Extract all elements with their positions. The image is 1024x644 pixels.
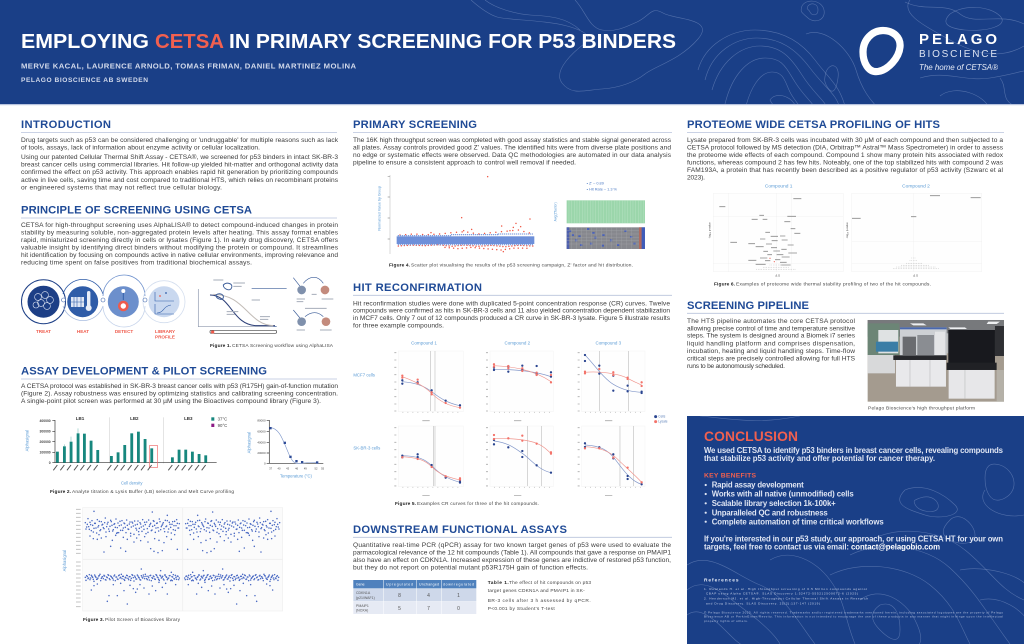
primary screening text: The 16K high throughput screen was completed with good assay statistics and stable signal generated across — [353, 137, 672, 144]
table 1 — [353, 580, 476, 614]
intro text: or engineered systems that may not reflect true cellular biology. — [21, 185, 222, 192]
volcano titles — [765, 184, 930, 190]
heading: primary screening: PRIMARY SCREENING — [353, 119, 477, 131]
line chart: melt curve: 55 — [321, 466, 325, 470]
table 1 caption: BR-3 cells after 3 h assessed by qPCR. — [488, 598, 591, 604]
line chart: melt curve: Alphasignal — [247, 432, 252, 453]
compound titles: Compound 2 — [504, 340, 531, 345]
intro text — [21, 137, 339, 192]
title: IN PRIMARY SCREENING FOR P53 BINDERS — [229, 30, 676, 53]
key benefits list — [705, 481, 884, 526]
key benefits list: Scalable library selection 1k-100k+ — [712, 499, 836, 508]
panel: conclusion — [687, 416, 1024, 644]
line chart: melt curve: 43 — [286, 466, 290, 470]
line chart: melt curve: Temperature (°C) — [280, 474, 313, 479]
principle text: rapid, miniaturized screening directly in cells or lysates (Figure 1). In early drug discovery, CETSA offers — [21, 237, 339, 244]
references: References — [704, 577, 739, 583]
primary screening text: no edge or systematic effects were observed. Data QC methodologies are automated in our data analysis — [353, 152, 672, 159]
references: and Drug Discovery. SLAS Discovery. 25(2):137-147 (2019) — [706, 601, 820, 605]
figure 3 caption — [83, 617, 181, 623]
row labels: MCF7 cells — [353, 372, 375, 377]
downstream text: also have an effect on CDKN1A. Increased expression of these genes are indictive of restored p53 function, — [353, 557, 671, 564]
assay text: A single-point pilot screen was performed at 30 µM using the Bioactives compound library (Figure 3). — [21, 398, 321, 405]
table 1: Unchanged — [419, 583, 439, 587]
row labels — [353, 372, 380, 451]
proteome text: CETSA protocol followed by MS detection (DIA, Orbitrap™ Astral™ Mass Spectrometer) in order to assess — [687, 145, 1004, 152]
volcano plots — [707, 184, 982, 278]
line chart: melt curve: 40000 — [257, 440, 266, 444]
protein label marks — [719, 196, 981, 265]
bar chart: analyte titration: 300000 — [40, 430, 51, 434]
intro text: breast cancer cells using commercial libraries. Hit follow-up yielded hit-matter and orthogonal activity data — [21, 161, 338, 168]
figure 4 caption: Scatter plot visualising the results of the p53 screening campaign, Z' factor and hit distribution. — [411, 263, 633, 269]
downstream text — [353, 542, 671, 572]
header contour pattern — [471, 0, 1024, 110]
hit reconfirmation text: for three example compounds. — [353, 322, 444, 329]
pipeline text: steps. The system is designed around a Biomek i7 series — [687, 333, 856, 340]
bar chart: analyte titration: 90°C — [218, 423, 227, 428]
title: CETSA — [155, 30, 224, 53]
affiliation: PELAGO BIOSCIENCE AB SWEDEN — [21, 77, 148, 84]
primary screening text: all plates. Assay controls provided good Z' values. The identified hits were from diverse plate positions and — [353, 145, 671, 152]
table 1: CDKN1A — [356, 591, 371, 595]
scatter plot: pilot screen: Alphasignal — [62, 550, 67, 571]
panel: screening pipeline — [687, 300, 1004, 411]
figure 1 caption: Figure 1. — [210, 343, 231, 349]
heading: downstream: DOWNSTREAM FUNCTIONAL ASSAYS — [353, 524, 568, 536]
figure 3 caption: Pilot Screen of Bioactives library — [105, 617, 181, 623]
panel: downstream functional assays — [353, 524, 672, 614]
principle text: valuable insight by identifying direct binders without modifying the protein or compound. It streamlines — [21, 244, 339, 251]
table 1: 0 — [457, 606, 460, 612]
copyright: Bioscience AB or PerkinElmer/Revvity. This information is not intended to encourage the use of these products in any manner that might infringe upon the intellectual — [704, 615, 1003, 619]
icon: heat — [63, 279, 103, 334]
panel: hit reconfirmation — [353, 282, 672, 507]
key benefits list: Works with all native (unmodified) cells — [712, 490, 854, 499]
protein point cloud — [757, 258, 940, 269]
line chart: melt curve — [247, 419, 325, 479]
downstream text: but they do not report on potential mutant p53R175H gain of function effects. — [353, 565, 588, 572]
pipeline text: liquid handling platform and comprises dispensation, — [687, 340, 855, 347]
table 1 caption — [488, 580, 591, 612]
scatter plot: pilot screen — [62, 508, 283, 611]
bar chart: analyte titration: LB3 — [184, 416, 193, 421]
conclusion contour pattern — [687, 416, 1024, 644]
workflow diagram — [198, 277, 333, 334]
red points — [402, 364, 642, 482]
principle text: hit identification by focusing on compounds active in native cellular environments, improving relevance and — [21, 252, 338, 259]
heading: proteome: PROTEOME WIDE CETSA PROFILING OF HITS — [687, 119, 941, 131]
assay text: (Figure 2). Assay robustness was ensured by optimizing statistics and calibrating screening concentration. — [21, 390, 338, 397]
table 1: 5 — [398, 606, 401, 612]
key benefits list: Complete automation of time critical workflows — [712, 517, 884, 526]
references — [704, 577, 868, 605]
table 1: 4 — [427, 593, 430, 599]
figure 6 caption: Figure 6. — [714, 282, 735, 288]
figure 4 caption: Figure 4. — [389, 263, 410, 269]
photo caption: Pelago Bioscience's high throughput platform — [868, 405, 975, 411]
table 1 caption: The effect of hit compounds on p53 — [509, 580, 591, 586]
intro text: Drug targets such as p53 can be considered challenging or 'undruggable' for multiple reasons such as lack — [21, 137, 339, 144]
bar chart: analyte titration: 400000 — [40, 419, 51, 423]
table 1: PMAIP1 — [356, 604, 369, 608]
curve legend: Cells — [658, 415, 666, 419]
CR curve charts — [353, 340, 668, 496]
logo — [863, 30, 998, 72]
table 1 caption: target genes CDKN1A and PMAIP1 in SK- — [488, 588, 585, 594]
line chart: melt curve: 40 — [277, 466, 281, 470]
table 1 caption: P<0.001 by Student's T-test — [488, 606, 555, 612]
primary screening text — [353, 137, 672, 167]
line chart: melt curve: 0 — [264, 461, 266, 465]
icon: library profile: LIBRARY — [155, 329, 175, 334]
figure 3 caption: Figure 3. — [83, 617, 104, 623]
contact text: targets, feel free to contact us via email: — [704, 542, 849, 551]
blue points — [402, 355, 642, 484]
references: CBAP using Alpha CETSA®. SLAS Discovery 1:52472-555212500072-6 (2025) — [706, 592, 858, 596]
logo: PELAGO — [919, 31, 997, 48]
logo: The home of CETSA® — [919, 63, 998, 72]
hit reconfirmation text: Hit reconfirmation studies were done with duplicated 5-point concentration response (CR) curves. Twelve — [353, 300, 670, 307]
figure 2 caption: Analyte titration & Lysis Buffer (LB) selection and Melt Curve profiling — [72, 489, 234, 495]
references: 1. Rowlands H. et al. High throughput screening of 0.5 Million compounds against — [704, 587, 867, 591]
header banner — [0, 0, 1024, 110]
line chart: melt curve: 46 — [295, 466, 299, 470]
bar chart: analyte titration: 0 — [49, 461, 51, 465]
key benefits list: Rapid assay development — [712, 481, 804, 490]
volcano titles: Compound 2 — [902, 184, 930, 190]
proteome text: Lysate prepared from SK-BR-3 cells was incubated with 30 µM of each compound and then subjected to a — [687, 137, 1003, 144]
reference lines — [431, 351, 633, 486]
heading: conclusion: CONCLUSION — [704, 429, 798, 444]
bar chart: analyte titration: Alphasignal — [25, 430, 30, 451]
bar chart: analyte titration: Cell density — [121, 481, 143, 486]
pipeline text: The HTS pipeline automates the core CETSA protocol — [687, 318, 856, 325]
curve legend — [654, 415, 668, 424]
volcano plots: -log₁₀ p-value — [845, 222, 849, 238]
copyright: © Pelago Bioscience 2025. All rights reserved. Trademarks and/or registered trademarks mentioned herein, including associated logotypes are the property of Pelago — [704, 611, 1003, 615]
title — [21, 30, 676, 53]
pipeline text — [687, 318, 856, 370]
workflow icons — [22, 275, 185, 340]
table 1: (p21/WAF1) — [356, 596, 375, 600]
proteome text — [687, 137, 1004, 181]
bar chart: analyte titration: 100000 — [40, 451, 51, 455]
icon: heat: HEAT — [77, 329, 89, 334]
panel: primary screening — [353, 119, 672, 269]
line chart: melt curve: 80000 — [257, 419, 266, 423]
table 1: downregulated — [443, 583, 474, 587]
table 1 caption: Table 1. — [488, 580, 509, 586]
figure 5 caption: Figure 5. — [395, 501, 416, 507]
proteome text: 2023). — [687, 174, 705, 181]
line chart: melt curve: 60000 — [257, 429, 266, 433]
scatter plot: primary screen: Avg(Z'factor) — [553, 202, 557, 221]
scatter plot: primary screen — [377, 175, 645, 254]
intro text: active in live cells, saving time and cost compared to traditional HTS, which relies on recombinant proteins — [21, 177, 339, 184]
icon: treat — [22, 280, 66, 334]
table 1: 8 — [398, 593, 401, 599]
principle text: CETSA for high-throughput screening uses AlphaLISA® to detect compound-induced changes in protein — [21, 221, 338, 229]
line chart: melt curve: 49 — [304, 466, 307, 470]
assay text: A CETSA protocol was established in SK-BR-3 breast cancer cells with p53 (R175H) gain-of-function mutation — [21, 383, 338, 390]
proteome text: the proteome wide effects of each compound. Compound 1 show many protein hits associated with redox — [687, 152, 1004, 159]
panel: principle of screening — [21, 205, 339, 349]
table 1: Gene — [356, 583, 365, 587]
panel: assay development — [21, 365, 338, 623]
pipeline text: allowing precise control of time and temperature sensitive — [687, 325, 855, 332]
principle text: stability by measuring soluble, non-aggregated protein levels after heating. This assay format enables — [21, 229, 339, 236]
table 1: 7 — [427, 606, 430, 612]
references: 2. Henderson MJ. et al. High-Throughput Cellular Thermal Shift Assays in Research — [704, 596, 868, 600]
contact text: If you're interested in our p53 study, our approach, or using CETSA HT for your own — [704, 535, 1003, 544]
intro text: Using our patented Cellular Thermal Shift Assay - CETSA®, we screened for p53 binders in intact SK-BR-3 — [21, 153, 338, 161]
pipeline text: runs to be autonomously scheduled. — [687, 363, 785, 370]
ring nodes — [62, 298, 147, 302]
figure 2 caption: Figure 2. — [50, 489, 71, 495]
bar chart: analyte titration: 37°C — [218, 417, 227, 422]
icon: detect — [103, 275, 145, 334]
red curves — [402, 366, 642, 482]
curve legend: Lysate — [658, 420, 668, 424]
key benefits list: Unparalleled QC and robustness — [712, 508, 828, 517]
pipeline text: incubation, heating and liquid handling steps. Time-flow — [687, 348, 855, 355]
compound titles — [411, 340, 622, 345]
icon: library profile: PROFILE — [155, 335, 175, 340]
scatter plot: primary screen: Normalized Value by Group — [377, 186, 381, 231]
downstream text: parmacological relevance of the 12 hit compounds (Table 1). All compounds that gave a response on PMAIP1 — [353, 549, 671, 556]
icon: detect: DETECT — [115, 329, 133, 334]
assay text — [21, 383, 338, 405]
figure 6 caption: Examples of proteome wide thermal stability profiling of two of the hit compounds. — [736, 282, 931, 288]
principle text: reducing time spent on false positives from traditional biochemical assays. — [21, 260, 252, 267]
contact text — [704, 535, 1003, 551]
heading: introduction: INTRODUCTION — [21, 119, 111, 131]
proteome text: functions, whereas compound 2 has few hits. Noteably, one of the top stabilized hits with compound 2 was — [687, 160, 1004, 167]
logo: BIOSCIENCE — [919, 49, 997, 60]
hit reconfirmation text: in MCF7 cells. Only 7 out of 12 compounds produced a CR curve in SK-BR-3 lysate. Figure 5 illustrate results — [353, 315, 671, 322]
line chart: melt curve: 52 — [314, 466, 318, 470]
heading: assay development: ASSAY DEVELOPMENT & PILOT SCREENING — [21, 365, 267, 377]
scatter plot: primary screen: • Hit Rate – 1.3 % — [587, 187, 618, 191]
table 1: (NOXA) — [356, 608, 368, 612]
volcano plots: Δ S — [775, 274, 780, 278]
volcano titles: Compound 1 — [765, 184, 793, 190]
photo: high throughput platform — [868, 320, 1004, 402]
principle text — [21, 221, 339, 267]
bar chart: analyte titration: LB1 — [76, 416, 85, 421]
hit reconfirmation text: compounds were confirmed as hits in SK-BR-3 cells and 11 also yielded concentration dependent stabilization — [353, 307, 670, 314]
copyright — [704, 611, 1003, 623]
primary screening text: pipeline to ensure a consistent approach to control well removal if needed. — [353, 160, 576, 167]
table 1: Upregulated — [386, 583, 413, 587]
scatter plot: primary screen: • Z' – 0.89 — [587, 182, 604, 186]
bar chart: analyte titration: 200000 — [40, 440, 51, 444]
hit reconfirmation text — [353, 300, 671, 329]
figure 5 caption: Examples CR curves for three of the hit compounds. — [417, 501, 539, 507]
heading: screening pipeline: SCREENING PIPELINE — [687, 300, 810, 312]
key benefits heading: KEY BENEFITS — [704, 472, 756, 479]
panel: proteome wide profiling — [687, 119, 1004, 288]
copyright: property rights of others. — [704, 619, 748, 623]
contact text: contact@pelagobio.com — [851, 542, 940, 551]
line chart: melt curve: 37 — [269, 466, 273, 470]
row labels: SK-BR-3 cells — [353, 446, 380, 451]
conclusion summary: We used CETSA to identify p53 binders in breast cancer cells, revealing compounds — [704, 446, 1004, 455]
heading: hit reconfirmation: HIT RECONFIRMATION — [353, 282, 482, 294]
blue curves — [402, 355, 642, 484]
conclusion summary — [704, 446, 1004, 463]
intro text: of tools, assays, lack of information about enzyme activity or cellular localization. — [21, 144, 260, 151]
figure 1 caption — [210, 343, 334, 349]
heading: principle: PRINCIPLE OF SCREENING USING CETSA — [21, 205, 252, 217]
line chart: melt curve: 20000 — [257, 451, 266, 455]
bar chart: analyte titration: LB2 — [130, 416, 139, 421]
intro text: confirmed the effect on p53 activity. This approach enables rapid hit generation by prioritizing compounds — [21, 169, 339, 176]
pipeline text: critical steps are precisely controlled allowing for full HTS — [687, 355, 856, 362]
bar chart: analyte titration — [25, 416, 227, 486]
volcano plots: Δ S — [913, 274, 918, 278]
compound titles: Compound 1 — [411, 340, 437, 345]
figure 1 caption: CETSA Screening workflow using AlphaLISA — [232, 343, 334, 349]
title: EMPLOYING — [21, 30, 149, 53]
volcano plots: -log₁₀ p-value — [707, 222, 711, 238]
downstream text: Quantitative real-time PCR (qPCR) assay for two known target genes of p53 were used to evaluate the — [353, 542, 671, 549]
conclusion summary: that stabilize p53 activity and offer potential for cancer therapy. — [704, 454, 935, 463]
plot frames — [398, 351, 645, 487]
table 1: 1 — [457, 593, 460, 599]
proteome text: FAM193A, a protein that has recently been described as a positive regulator of p53 activity (Szwarc et al — [687, 167, 1004, 174]
panel: introduction — [21, 119, 339, 192]
icon: library profile — [143, 281, 185, 340]
icon: treat: TREAT — [36, 329, 51, 334]
authors: MERVE KACAL, LAURENCE ARNOLD, TOMAS FRIMAN, DANIEL MARTINEZ MOLINA — [21, 62, 356, 70]
compound titles: Compound 3 — [595, 340, 622, 345]
